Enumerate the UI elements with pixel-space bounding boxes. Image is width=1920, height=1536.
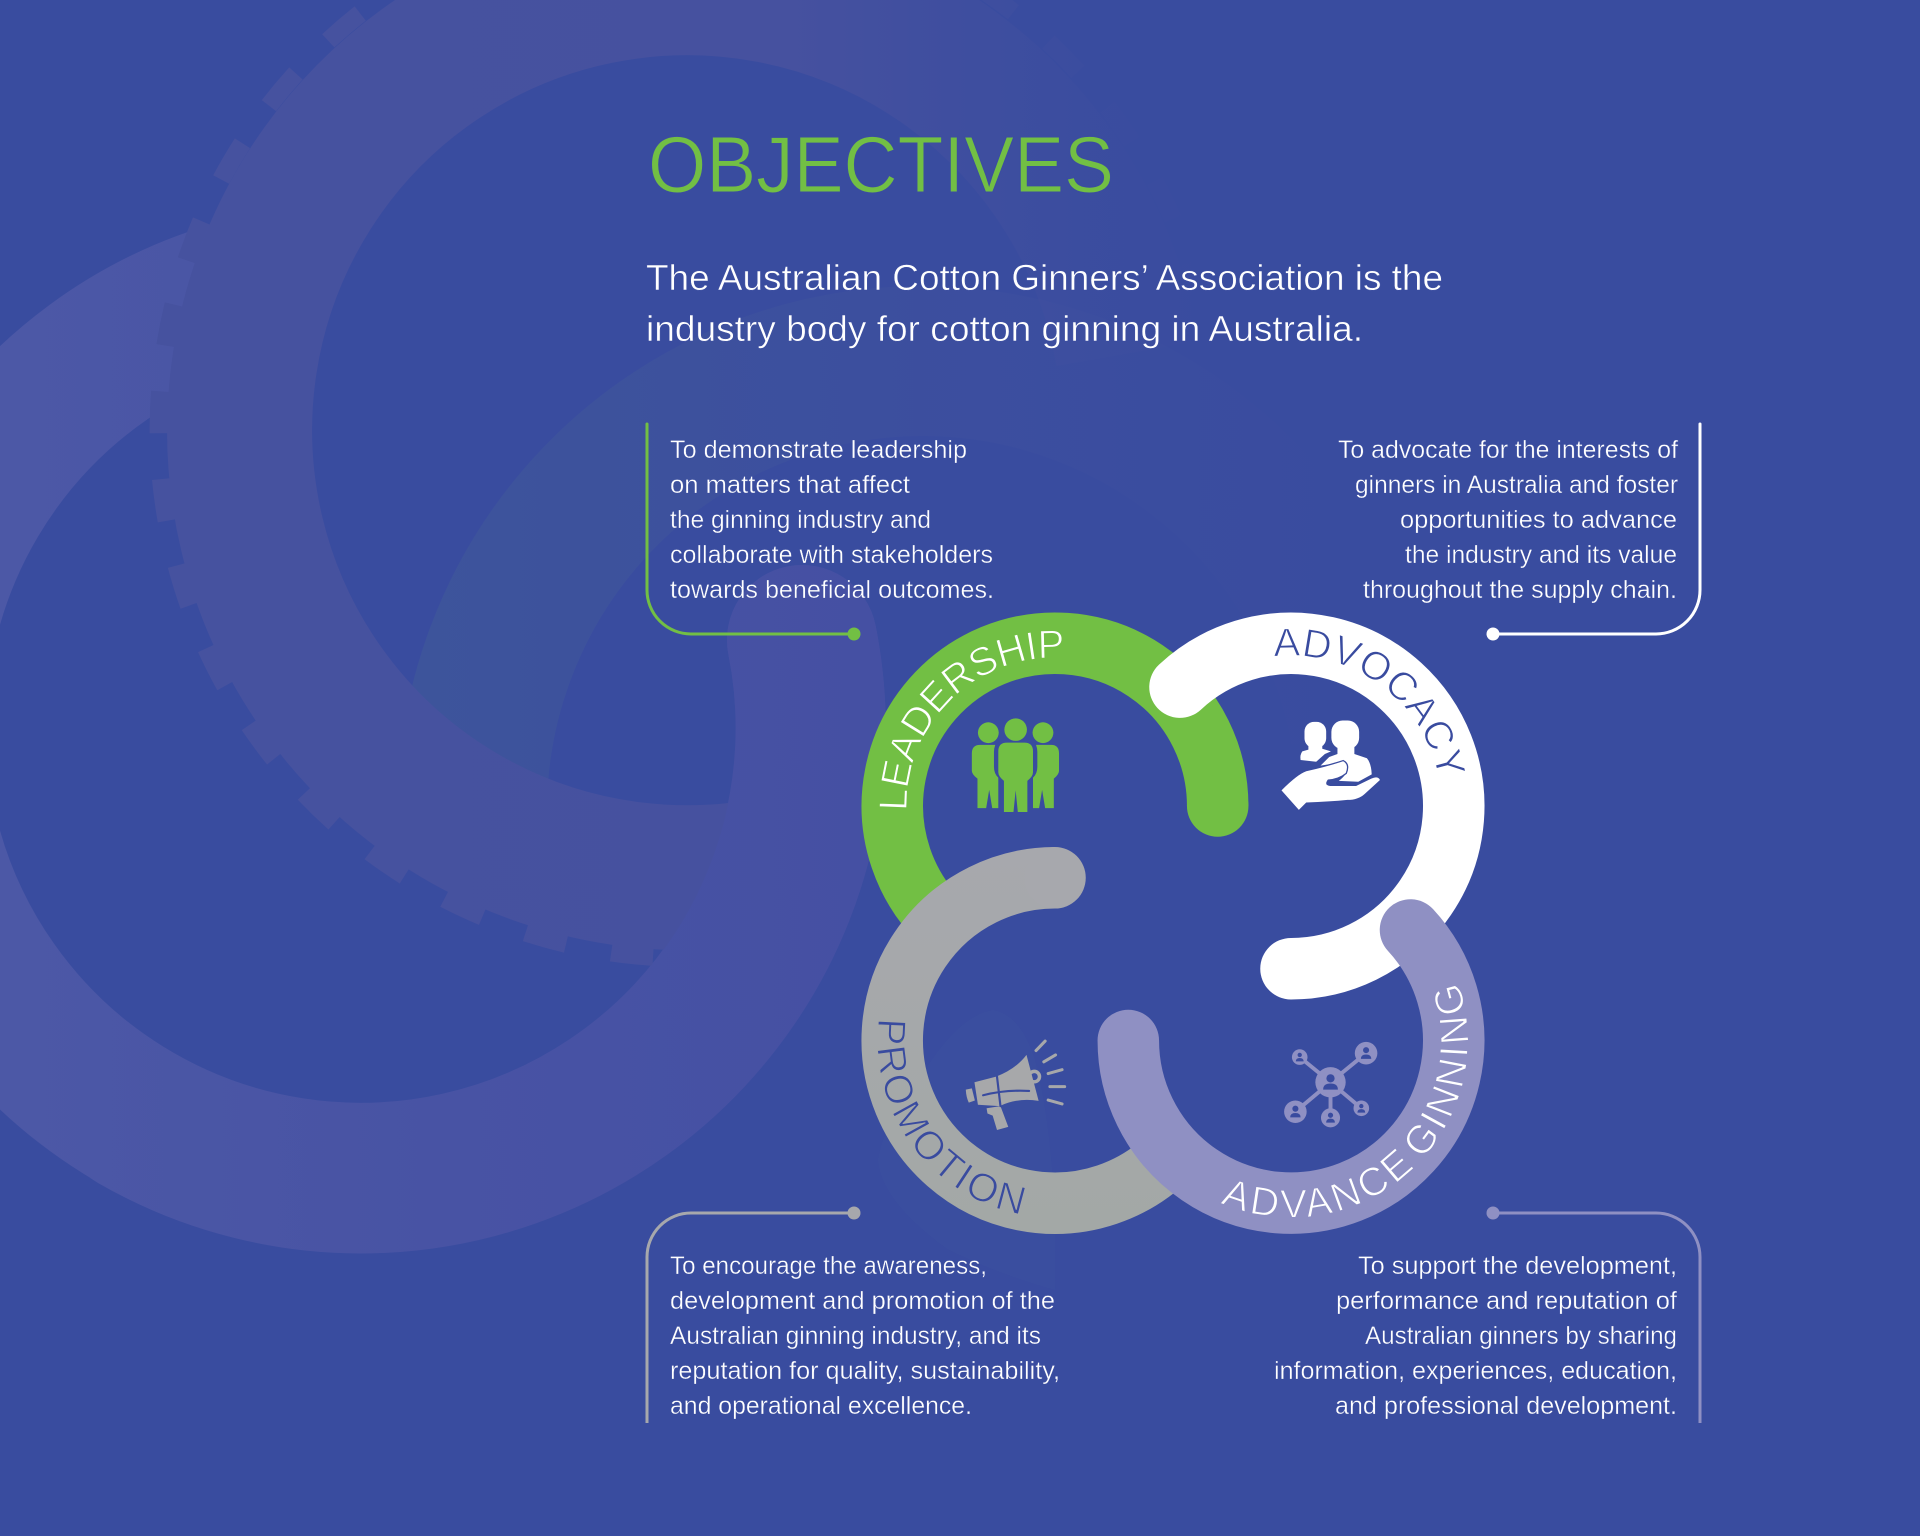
background ring: large arc end, over gear [135,640,811,1178]
background ring: toothed gear [159,0,1209,958]
background ring: large lower left arc, under gear [0,293,811,1178]
connector: leadership [647,424,860,640]
text: advance ginning objective: information, experiences, education, [1274,1357,1677,1385]
text: advocacy objective: ginners in Australia and foster [1355,471,1678,499]
label: advance ginning: ADVANCE GINNING [1221,986,1468,1217]
icon: network of people [1284,1042,1377,1127]
label: advocacy: ADVOCACY [1274,629,1465,771]
background swirl [0,0,1365,1290]
text: advocacy objective [1338,436,1678,604]
connector: promotion [647,1206,860,1423]
text: advance ginning objective: performance and reputation of [1336,1287,1677,1315]
panel: promotion objective [647,1206,1060,1423]
ring: advance ginning [1128,930,1454,1203]
text: promotion objective [670,1252,1060,1420]
text: advance ginning objective [1274,1252,1677,1420]
text: advocacy objective: the industry and its value [1405,541,1677,569]
text: advocacy objective: To advocate for the interests of [1338,436,1678,464]
text: leadership objective: the ginning industry and [670,506,931,534]
text: advance ginning objective: and professional development. [1335,1392,1677,1420]
panel: advance ginning objective [1274,1206,1700,1423]
intro text [646,257,1443,349]
connector: advocacy [1486,424,1700,640]
icon: megaphone [966,1041,1065,1130]
title: OBJECTIVES [648,120,1114,209]
text: leadership objective: To demonstrate leadership [670,436,967,464]
text: advocacy objective: throughout the supply chain. [1363,576,1677,604]
text: advance ginning objective: Australian ginners by sharing [1365,1322,1677,1350]
connector: advance ginning [1486,1206,1700,1423]
text: promotion objective: reputation for quality, sustainability, [670,1357,1060,1385]
panel: advocacy objective [1338,424,1700,640]
icon: group of people [972,718,1059,812]
background ring: faint upper arc [472,361,1365,810]
ring: advocacy [1180,643,1454,969]
background ring: faint lower shape [878,1010,1055,1290]
label: promotion: PROMOTION [878,1022,1025,1214]
icon: hand holding people [1282,721,1380,810]
text: leadership objective [670,436,994,604]
label: leadership: LEADERSHIP [880,631,1062,808]
intro text: industry body for cotton ginning in Australia. [646,308,1363,349]
text: promotion objective: and operational excellence. [670,1392,972,1420]
intro text: The Australian Cotton Ginners’ Association is the [646,257,1443,298]
text: promotion objective: development and promotion of the [670,1287,1055,1315]
interlocking rings diagram [861,612,1485,1234]
text: leadership objective: on matters that affect [670,471,910,499]
text: leadership objective: towards beneficial outcomes. [670,576,994,604]
text: promotion objective: To encourage the awareness, [670,1252,987,1280]
ring: leadership [892,643,1218,921]
ring: promotion [892,878,1170,1203]
text: advance ginning objective: To support the development, [1358,1252,1677,1280]
text: promotion objective: Australian ginning industry, and its [670,1322,1041,1350]
text: advocacy objective: opportunities to advance [1400,506,1677,534]
text: leadership objective: collaborate with stakeholders [670,541,993,569]
panel: leadership objective [647,424,994,640]
